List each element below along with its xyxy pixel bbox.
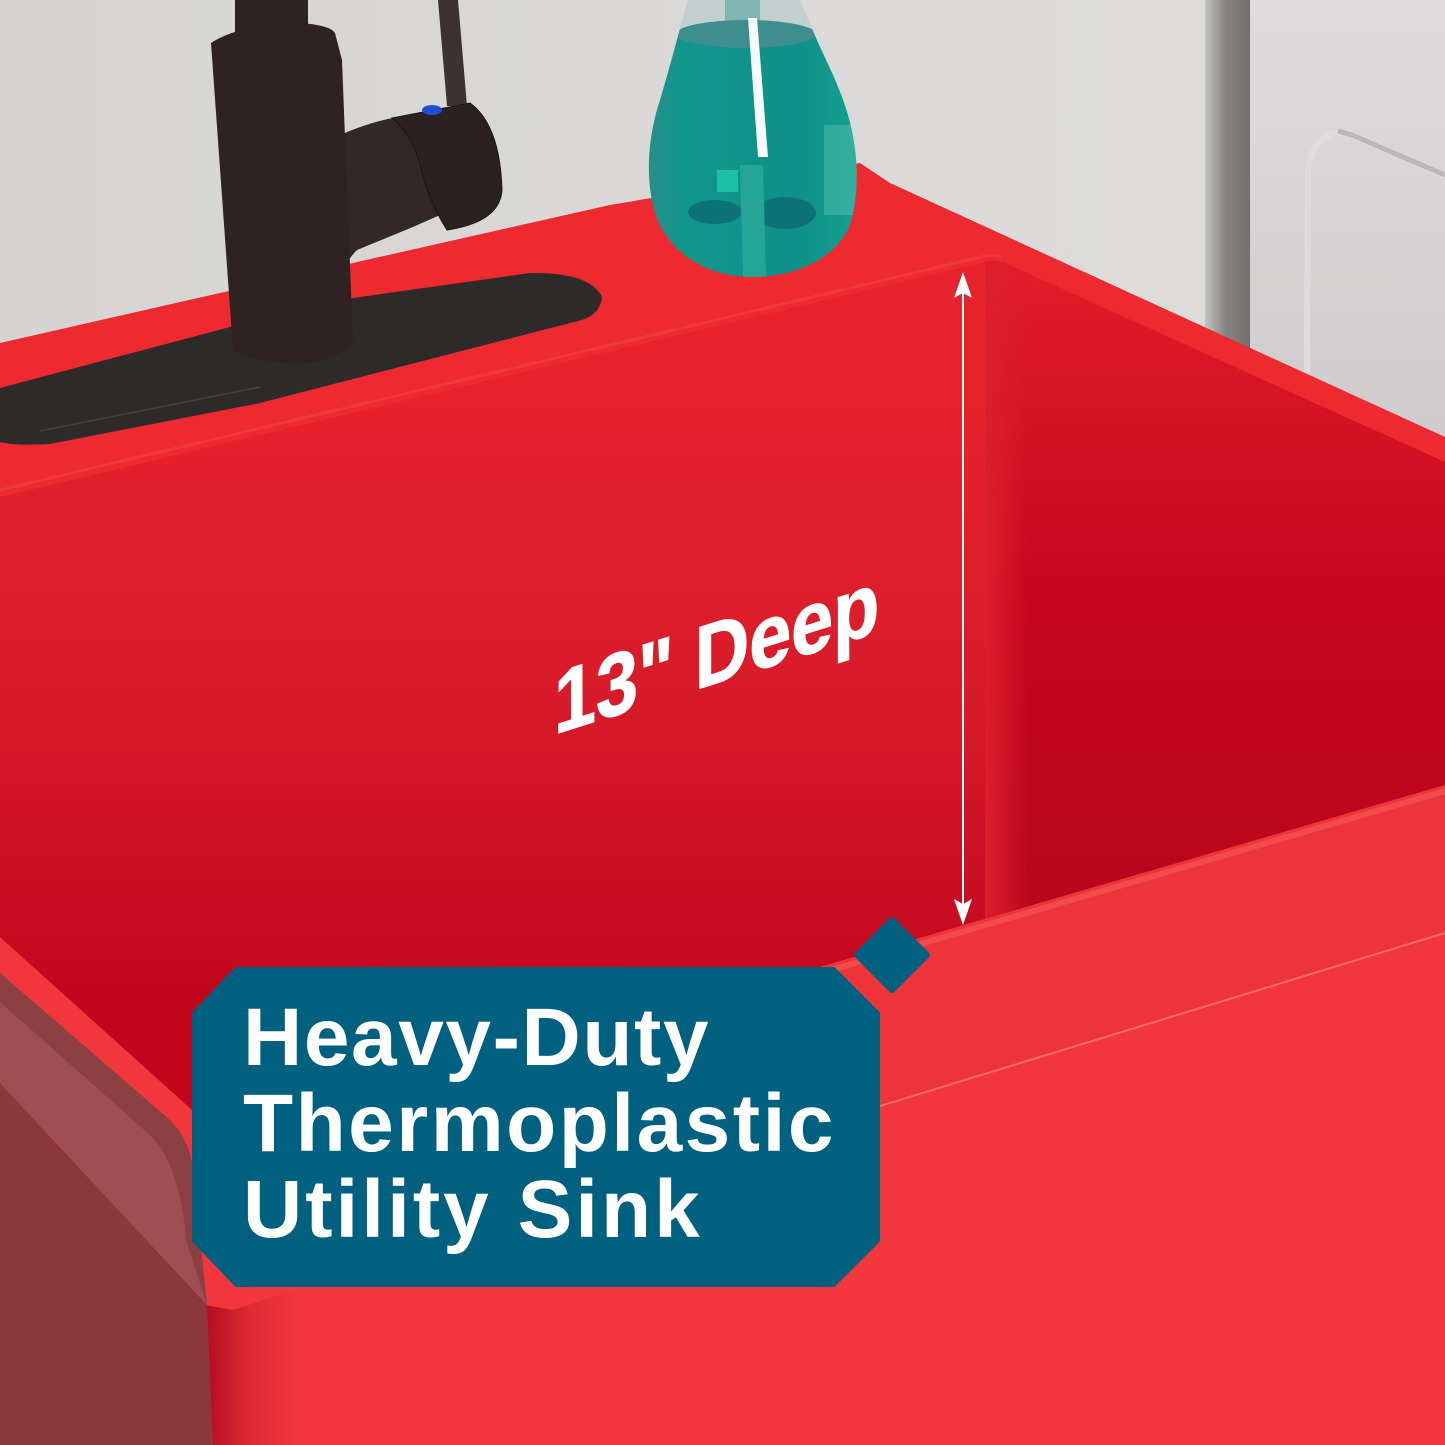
sink left side	[0, 973, 213, 1445]
sink basin right wall	[985, 250, 1445, 960]
faucet blue indicator	[422, 105, 442, 115]
callout heading: Heavy-Duty	[243, 992, 710, 1083]
faucet deck plate	[0, 273, 602, 445]
sink deck	[0, 163, 1445, 497]
bottle dark base	[688, 197, 816, 229]
callout marker diamond	[857, 920, 927, 990]
faucet body	[211, 23, 353, 363]
bottle label	[824, 125, 858, 215]
faucet handle	[392, 103, 502, 230]
depth label: 13" Deep	[554, 551, 879, 754]
glass highlight	[748, 18, 768, 157]
faucet neck	[235, 0, 308, 46]
bottle light square	[717, 170, 738, 192]
basin corner shading	[985, 255, 1028, 935]
bottle pump tube top	[725, 0, 760, 21]
callout heading: Thermoplastic	[243, 1078, 836, 1169]
callout heading: Utility Sink	[243, 1164, 703, 1255]
faucet	[211, 0, 502, 363]
sink basin back wall	[0, 255, 990, 1140]
faucet arm	[340, 118, 470, 264]
dispensing tube	[740, 165, 766, 277]
faucet lever rod	[438, 0, 467, 106]
sink front rim and face	[0, 785, 1445, 1445]
callout panel	[193, 968, 879, 1286]
soap bottle	[640, 0, 865, 283]
depth measurement arrow	[954, 272, 972, 925]
bottle liquid surface	[676, 20, 816, 48]
bottle liquid	[640, 33, 865, 283]
bottle glass	[680, 0, 812, 30]
